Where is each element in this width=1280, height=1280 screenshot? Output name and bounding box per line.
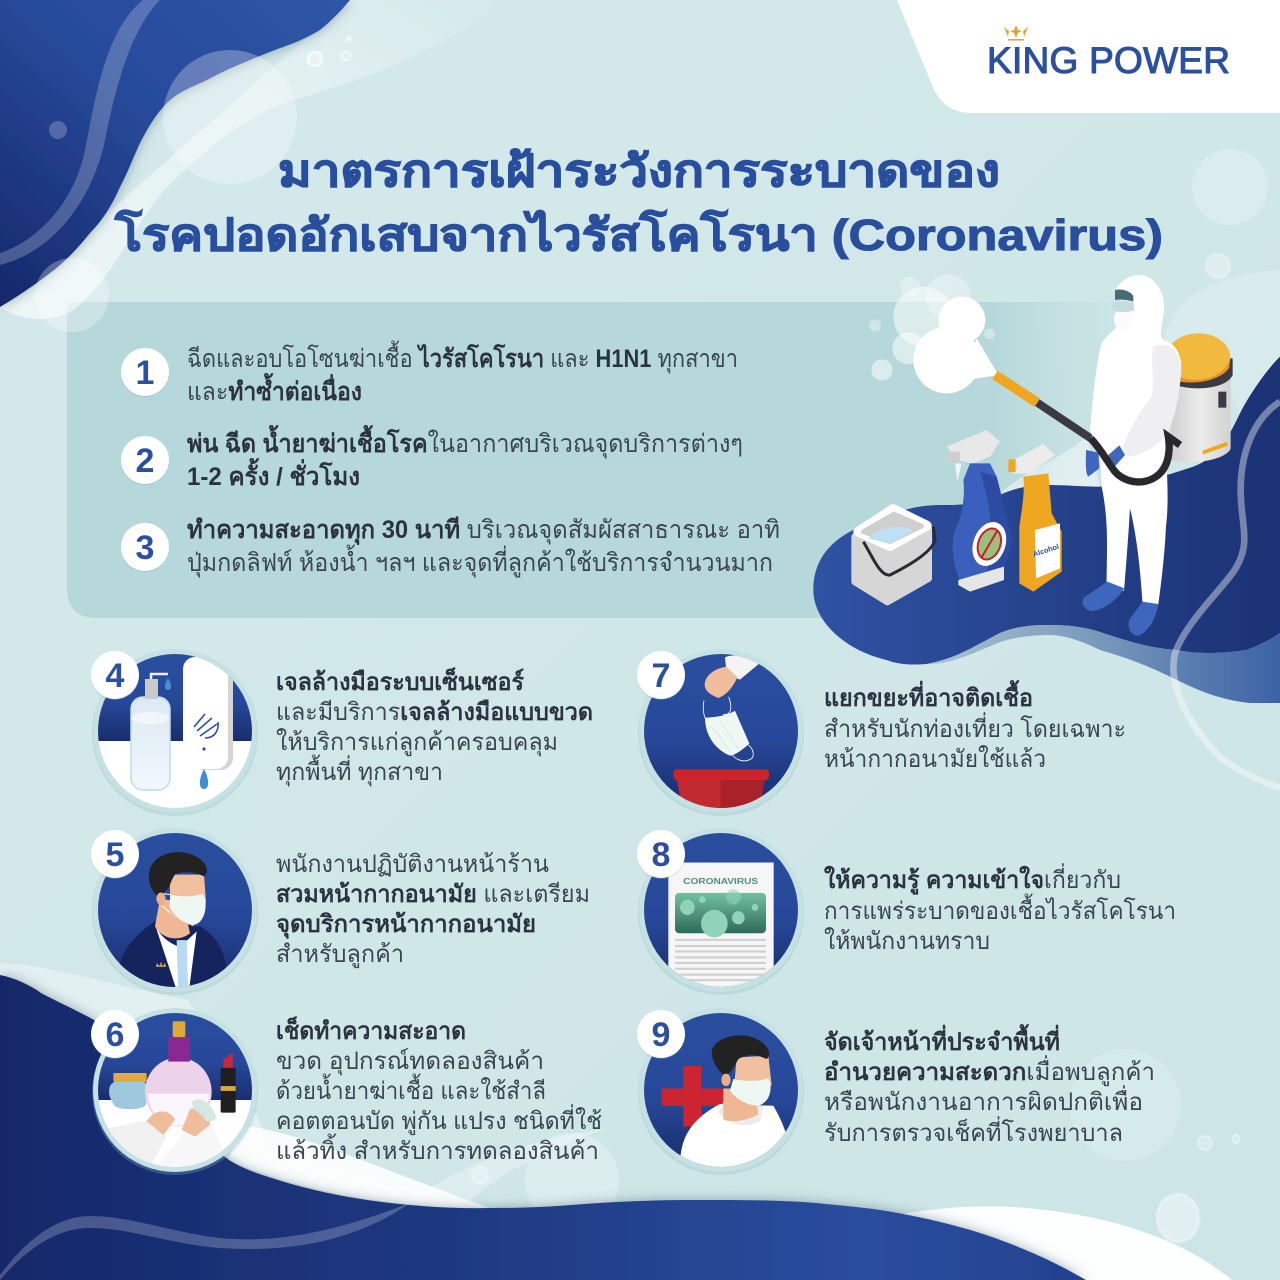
logo: King Power [987, 25, 1230, 81]
number 6: 6 [106, 1016, 124, 1054]
number 3: 3 [136, 529, 154, 567]
icon: medical officer [638, 1008, 804, 1175]
text 5: พนักงานปฏิบัติงานหน้าร้าน [276, 851, 549, 878]
text 5 [276, 851, 590, 969]
measure 9: area officers [637, 1008, 1155, 1175]
bottom right white wave [890, 1206, 1232, 1280]
ribbon top left [0, 0, 160, 265]
text 8 [824, 863, 1176, 955]
title: โรคปอดอักเสบจากไวรัสโคโรนา (Coronavirus) [114, 208, 1163, 260]
text 5: สวมหน้ากากอนามัย และเตรียม [276, 881, 590, 908]
icon: hand gel [92, 649, 258, 816]
number 8 [637, 830, 685, 879]
title [114, 147, 1163, 260]
bottom bright white band [229, 1125, 490, 1208]
number 1 [121, 348, 169, 397]
orange bottle [1008, 444, 1062, 592]
text 8: การแพร่ระบาดของเชื้อไวรัสโคโรนา [824, 893, 1176, 925]
bucket [855, 507, 935, 602]
title: มาตรการเฝ้าระวังการระบาดของ [278, 147, 1000, 196]
suit [1090, 275, 1181, 605]
number 7 [637, 651, 685, 700]
number 4: 4 [106, 657, 125, 695]
text 2 [187, 424, 743, 491]
mist [1000, 437, 1100, 493]
text 7 [824, 679, 1126, 773]
text 4: และมีบริการเจลล้างมือแบบขวด [276, 699, 593, 726]
bubble bottom right [1157, 1194, 1199, 1242]
text 9 [824, 1023, 1155, 1147]
decorative light swoosh [0, 0, 500, 319]
text 6: เช็ดทำความสะอาด [276, 1016, 466, 1045]
text 3: ทำความสะอาดทุก 30 นาที บริเวณจุดสัมผัสสาธารณะ อาทิ [187, 516, 780, 546]
measure 3 [121, 516, 780, 578]
number 9 [637, 1010, 685, 1059]
text 3 [187, 516, 780, 578]
text 4 [276, 667, 593, 787]
number 9: 9 [652, 1016, 670, 1054]
panel: measures 1-3 [67, 302, 1160, 618]
face visor [1115, 289, 1133, 302]
text 9: หรือพนักงานอาการผิดปกติเพื่อ [824, 1085, 1143, 1116]
measure 4: hand gel [91, 649, 593, 816]
measure 2 [121, 424, 743, 491]
text 1: ฉีดและอบโอโซนฆ่าเชื้อ ไวรัสโคโรนา และ H1N1 ทุกสาขา [187, 340, 738, 374]
number 3 [121, 523, 169, 572]
text 8: ให้ความรู้ ความเข้าใจเกี่ยวกับ [824, 863, 1121, 895]
text 1: และทำซ้ำต่อเนื่อง [187, 372, 362, 406]
text 9: อำนวยความสะดวกเมื่อพบลูกค้า [824, 1055, 1155, 1087]
bottle label: Alcohol [1032, 542, 1060, 559]
number 4 [91, 651, 139, 700]
text 2: พ่น ฉีด น้ำยาฆ่าเชื้อโรคในอากาศบริเวณจุดบริการต่างๆ [187, 424, 743, 459]
number 2: 2 [136, 442, 154, 480]
number 1: 1 [136, 354, 154, 392]
sprayer wand [995, 375, 1037, 403]
hose [1091, 437, 1180, 482]
bottom left white swoosh [0, 963, 490, 1208]
text 7: แยกขยะที่อาจติดเชื้อ [824, 679, 1033, 712]
text 5: จุดบริการหน้ากากอนามัย [276, 911, 536, 940]
blob lower band [927, 625, 1280, 703]
suit shade [1123, 345, 1181, 457]
text 6 [276, 1016, 602, 1165]
bottom wave [0, 975, 1086, 1280]
icon: cosmetics cleaning [92, 1008, 258, 1178]
mist behind [1163, 270, 1280, 413]
text 9: รับการตรวจเช็คที่โรงพยาบาล [824, 1116, 1123, 1147]
bottom ribbon [0, 1203, 410, 1280]
text 4: ให้บริการแก่ลูกค้าครอบคลุม [276, 728, 558, 757]
number 8: 8 [652, 836, 670, 874]
measure 1 [121, 340, 738, 406]
newspaper headline: CORONAVIRUS [683, 877, 759, 886]
text 6: คอตตอนบัด พู่กัน แปรง ชนิดที่ใช้ [276, 1104, 602, 1136]
text 7: หน้ากากอนามัยใช้แล้ว [824, 745, 1046, 773]
text 7: สำหรับนักท่องเที่ยว โดยเฉพาะ [824, 712, 1126, 743]
text 8: ให้พนักงานทราบ [824, 927, 990, 955]
text 6: ขวด อุปกรณ์ทดลองสินค้า [276, 1047, 544, 1076]
measure 5: staff masks [91, 828, 590, 995]
text 6: แล้วทิ้ง สำหรับการทดลองสินค้า [276, 1133, 599, 1165]
gloves [1086, 450, 1099, 477]
text 5: สำหรับลูกค้า [276, 941, 404, 969]
number 7: 7 [652, 657, 670, 695]
illustration: disinfection worker [813, 270, 1280, 788]
bubbles and spray [869, 274, 998, 393]
icon: crown [1004, 25, 1028, 41]
measure 6: cleaning testers [91, 1008, 602, 1178]
number 2 [121, 436, 169, 485]
ribbon [1173, 402, 1280, 788]
bottom translucent wisp [408, 1128, 610, 1206]
icon: news sheet [638, 828, 804, 995]
text 1 [187, 340, 738, 406]
measure 7: separate waste [637, 649, 1126, 816]
text 6: ด้วยน้ำยาฆ่าเชื้อ และใช้สำลี [276, 1073, 546, 1105]
blob ground [813, 357, 1280, 665]
text 3: ปุ่มกดลิฟท์ ห้องน้ำ ฯลฯ และจุดที่ลูกค้าใช้บริการจำนวนมาก [187, 544, 773, 578]
text 2: 1-2 ครั้ง / ชั่วโมง [187, 457, 360, 491]
logo wordmark: KING POWER [987, 40, 1230, 81]
icon: staff with mask [92, 828, 258, 995]
measure 8: staff education [637, 828, 1176, 995]
text 4: ทุกพื้นที่ ทุกสาขา [276, 754, 443, 787]
text 4: เจลล้างมือระบบเซ็นเซอร์ [276, 667, 524, 696]
icon: mask into red bin [638, 649, 804, 816]
top left wave [0, 0, 350, 307]
number 5: 5 [106, 836, 124, 874]
number 5 [91, 830, 139, 879]
blue spray bottle [947, 430, 1012, 592]
backpack tank [1166, 333, 1233, 462]
boots [1083, 582, 1124, 611]
text 9: จัดเจ้าหน้าที่ประจำพื้นที่ [824, 1023, 1060, 1056]
logo panel [897, 0, 1280, 113]
number 6 [91, 1010, 139, 1059]
